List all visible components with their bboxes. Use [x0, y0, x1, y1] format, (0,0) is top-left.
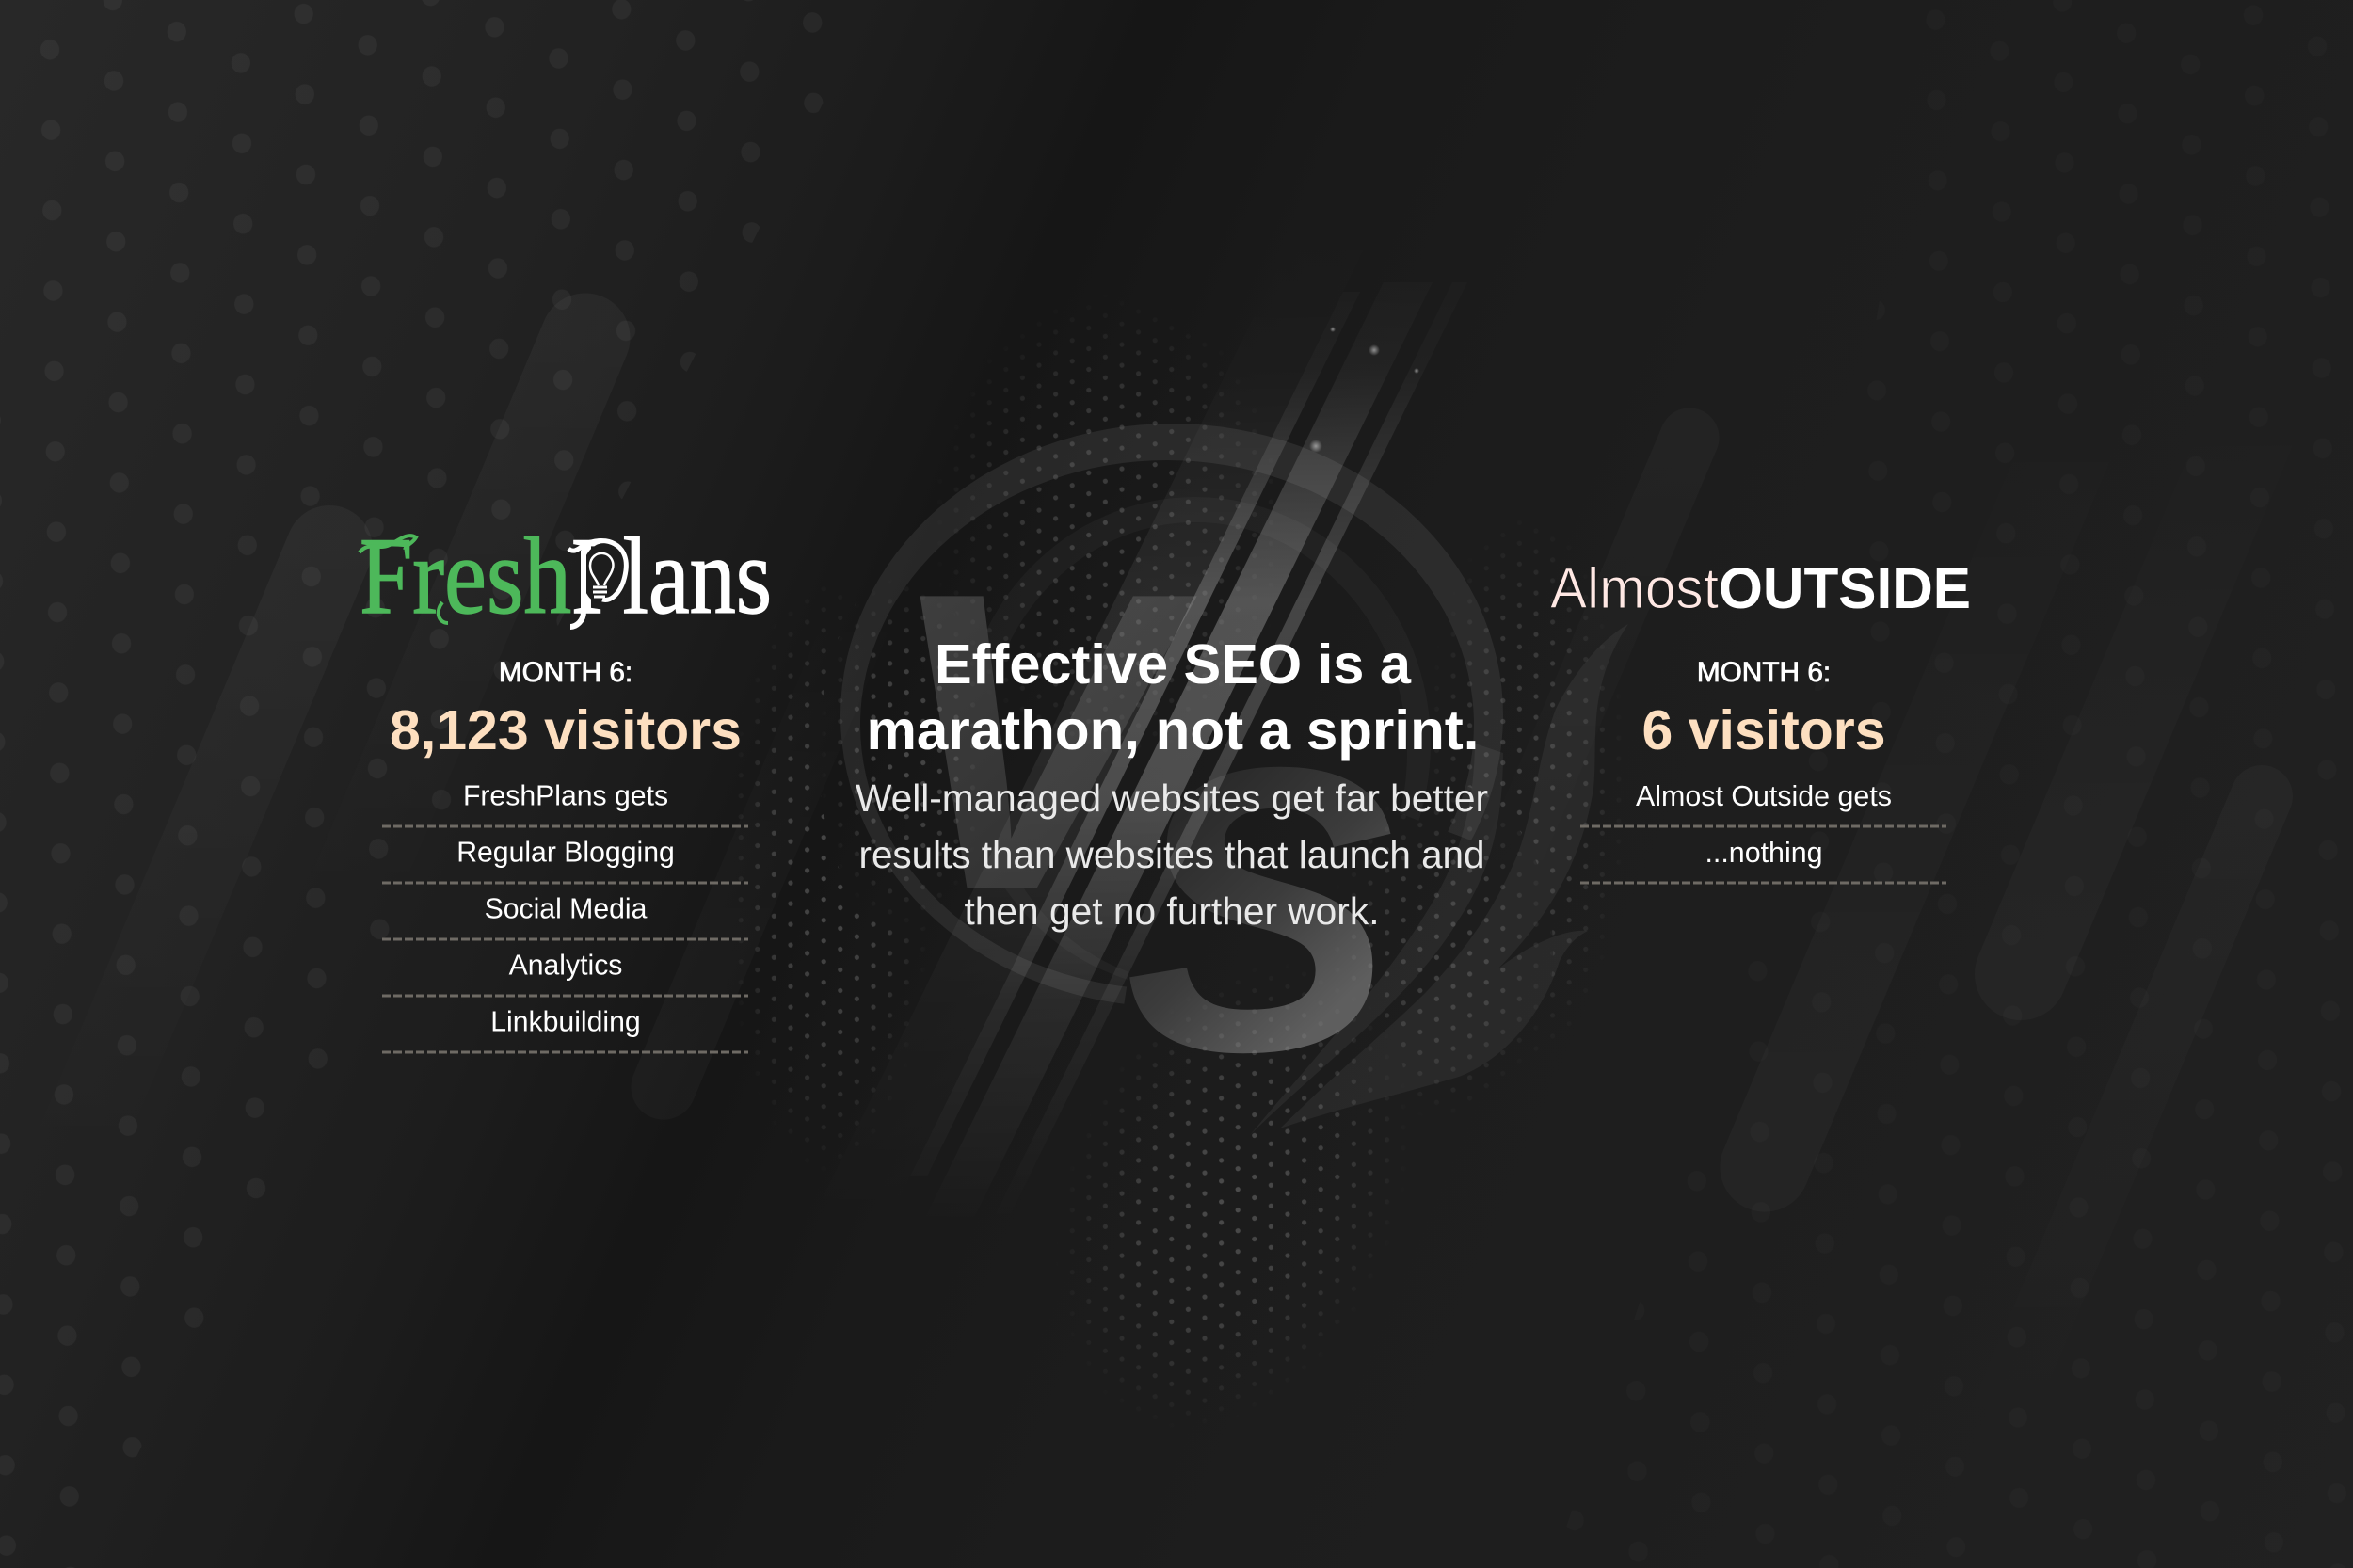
body copy: results than websites that launch and [858, 833, 1485, 876]
flame tail [1250, 624, 1628, 1135]
AlmostOUTSIDE logo [1550, 556, 1971, 620]
services list: Almost Outside gets [1636, 780, 1892, 812]
background dot grid: left [0, 0, 823, 1568]
visitor count: 8,123 visitors [390, 699, 742, 761]
big VS lettering [885, 505, 1397, 1136]
diagonal light stripes [796, 216, 1467, 1318]
services list: Analytics [509, 951, 622, 981]
services list [382, 781, 748, 1052]
big VS lettering: S [1125, 684, 1397, 1136]
body copy: Well-managed websites get far better [856, 776, 1488, 820]
visitor count: 6 visitors [1641, 699, 1886, 761]
services list [1580, 780, 1946, 883]
big VS lettering: V [885, 505, 1203, 978]
halftone dots [739, 324, 1605, 1402]
body copy [856, 776, 1488, 933]
AlmostOUTSIDE logo: OUTSIDE [1719, 556, 1971, 620]
sparks [1309, 327, 1419, 453]
body copy: then get no further work. [964, 889, 1380, 933]
month label: MONTH 6: [1697, 657, 1831, 688]
versus ring emblem [840, 424, 1503, 1007]
services list: FreshPlans gets [463, 781, 668, 811]
services list: Regular Blogging [456, 838, 675, 868]
background capsules [72, 338, 2262, 1455]
AlmostOUTSIDE logo: Almost [1550, 556, 1719, 620]
headline: marathon, not a sprint. [866, 698, 1480, 761]
services list: ...nothing [1705, 837, 1823, 869]
panel: AlmostOutside column [1550, 556, 1971, 883]
panel: FreshPlans column [360, 516, 772, 1052]
FreshPlans logo: Plans [571, 516, 772, 637]
panel: central message [856, 632, 1488, 933]
headline [866, 632, 1480, 761]
FreshPlans logo [360, 516, 772, 637]
background dot grid: right [1553, 0, 2353, 1568]
headline: Effective SEO is a [935, 632, 1412, 696]
FreshPlans logo: Fresh [360, 516, 571, 637]
services list: Linkbuilding [490, 1007, 641, 1037]
month label: MONTH 6: [499, 657, 632, 688]
services list: Social Media [485, 894, 648, 924]
